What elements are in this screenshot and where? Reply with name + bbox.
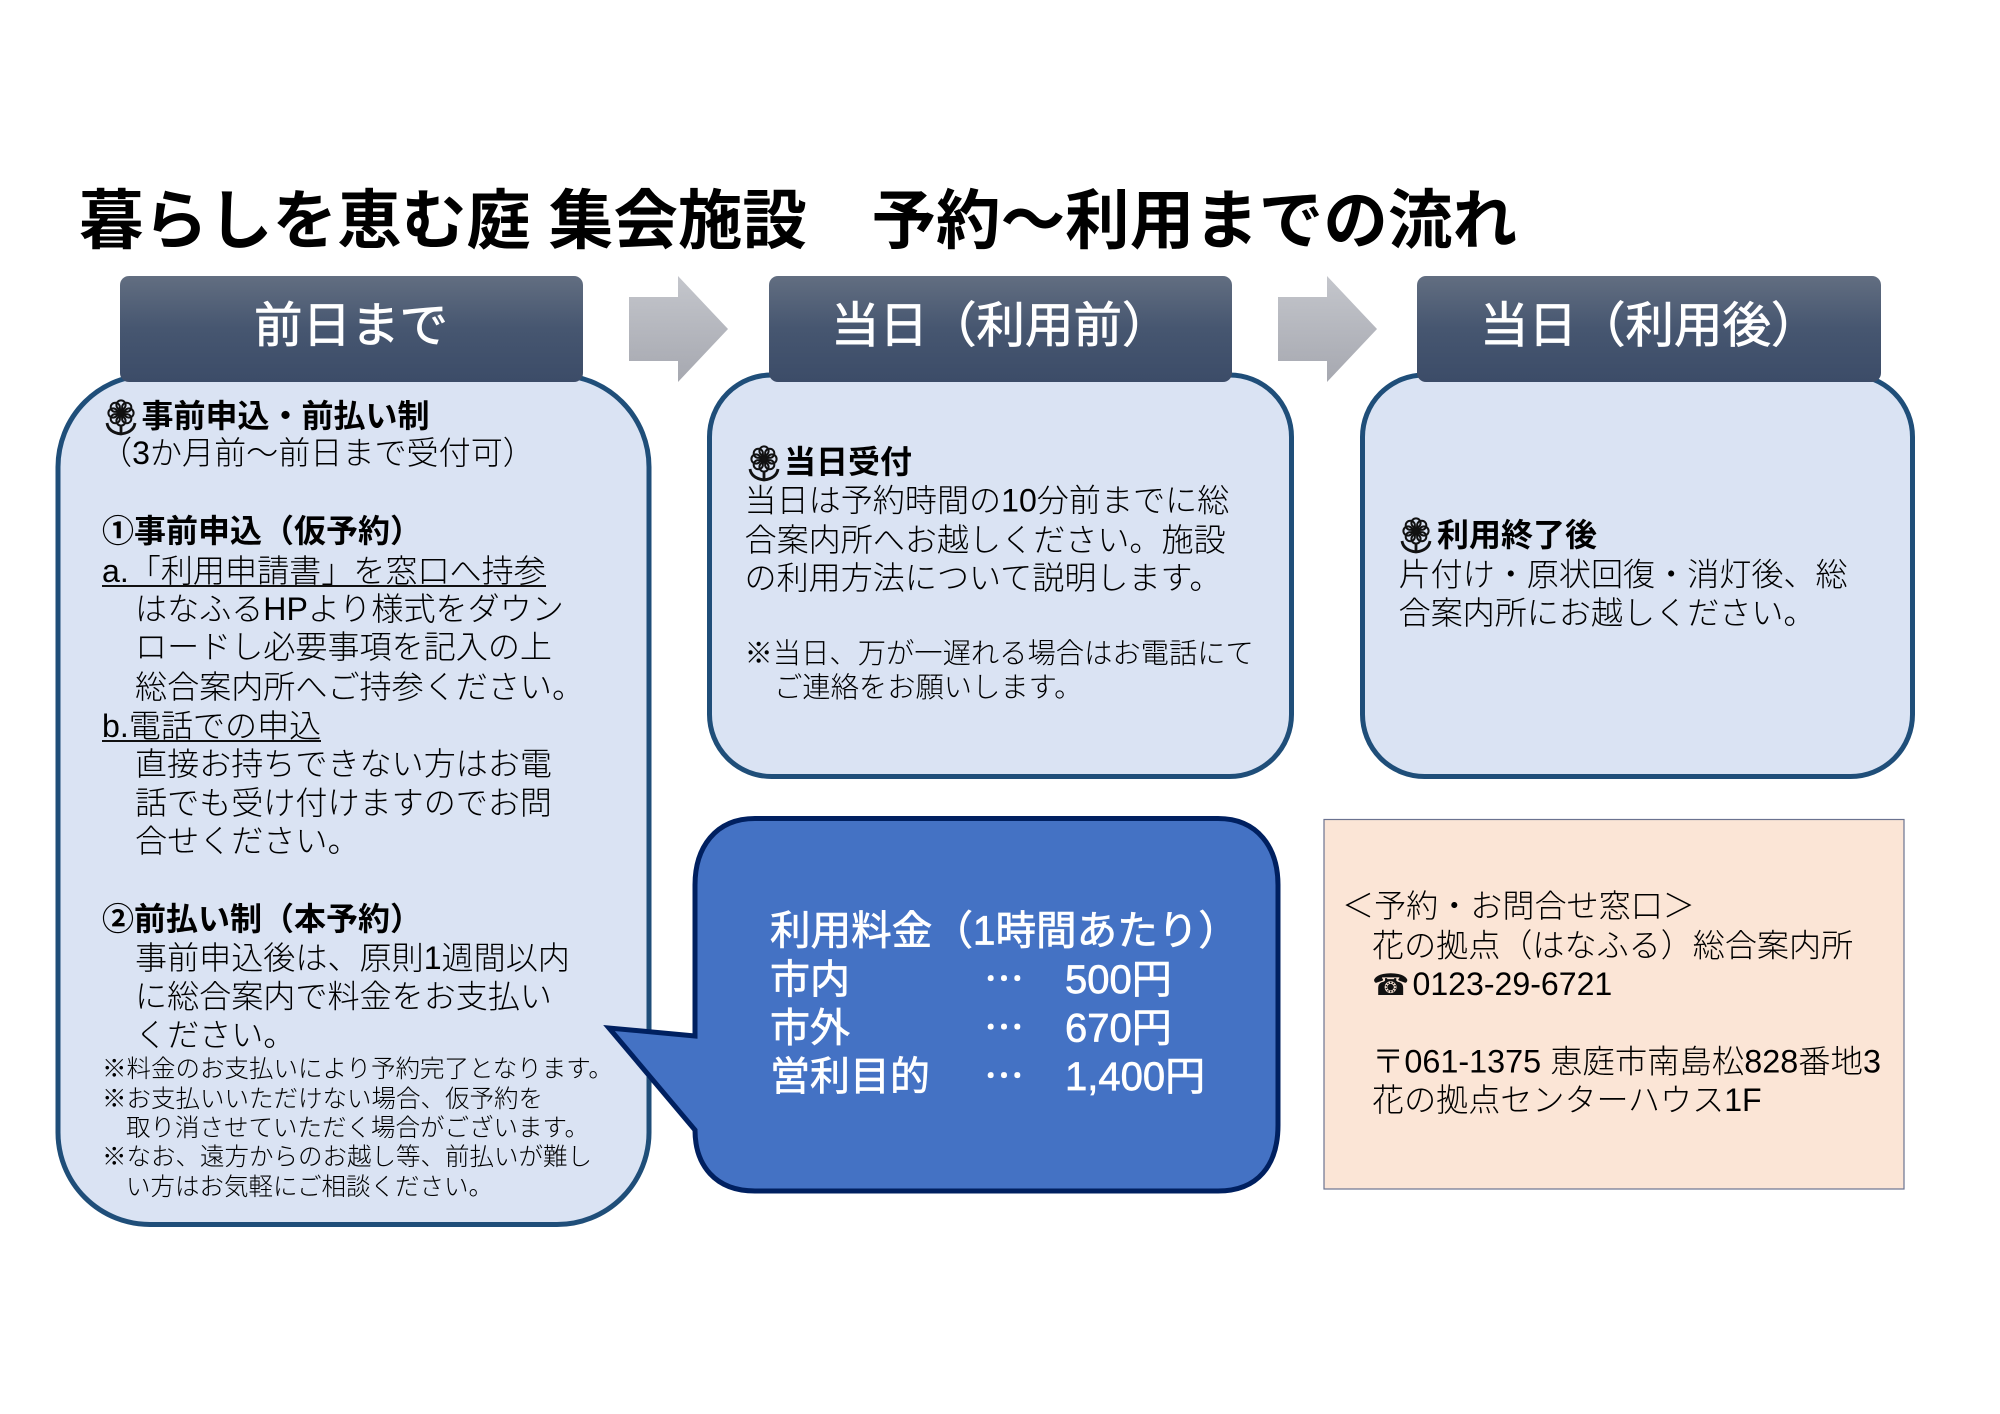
icon: flower	[1402, 518, 1430, 552]
fee text: 市内	[770, 958, 850, 1002]
panel 1 background	[58, 375, 649, 1224]
panel 1 body text: ※お支払いいただけない場合、仮予約を	[102, 1085, 543, 1113]
panel 2 body text: の利用方法について説明します。	[744, 560, 1222, 596]
panel 1 body text: b.電話での申込	[102, 708, 321, 744]
panel 3 background	[1362, 375, 1912, 776]
contact text	[1342, 888, 1881, 1118]
panel 1 body text: ①事前申込（仮予約）	[102, 513, 422, 549]
panel 1 body text	[100, 435, 613, 1201]
heading: advance application: 事前申込・前払い制	[142, 398, 430, 434]
fee text: …	[984, 996, 1024, 1054]
panel 1 body text: 取り消させていただく場合がございます。	[126, 1114, 589, 1142]
panel 1 body text: 合せください。	[135, 823, 360, 859]
panel 1 body text: ※なお、遠方からのお越し等、前払いが難し	[102, 1143, 592, 1171]
panel 3 body text: 合案内所にお越しください。	[1398, 595, 1816, 631]
panel 3 header: 当日（利用後）	[1480, 299, 1820, 353]
contact text: 0123-29-6721	[1412, 966, 1612, 1002]
panel 1 body text: い方はお気軽にご相談ください。	[126, 1173, 493, 1201]
callout shape	[609, 818, 1278, 1191]
panel 1 header	[120, 276, 583, 382]
panel 1 body text: ロードし必要事項を記入の上	[135, 629, 552, 665]
panel 1 body text: はなふるHPより様式をダウン	[135, 591, 564, 627]
fee text: 市外	[770, 1006, 850, 1050]
panel 1 body text: （3か月前～前日まで受付可）	[100, 435, 535, 471]
fee text: …	[984, 947, 1024, 1005]
fee text: 500円	[1065, 958, 1172, 1002]
panel: day of, after use	[1362, 276, 1912, 776]
fee text: 1,400円	[1065, 1055, 1205, 1099]
fee text: 利用料金（1時間あたり）	[770, 908, 1239, 954]
fee text: 営利目的	[770, 1055, 930, 1099]
heading: same-day reception: 当日受付	[784, 444, 912, 480]
panel 1 body text: ください。	[135, 1017, 295, 1053]
panel 1 body text: 直接お持ちできない方はお電	[135, 746, 552, 782]
panel 2 body text: 合案内所へお越しください。施設	[744, 522, 1226, 558]
contact text: 〒061-1375 恵庭市南島松828番地3	[1372, 1044, 1881, 1080]
panel 1 body text: ②前払い制（本予約）	[102, 901, 422, 937]
panel: day of, before use	[710, 276, 1292, 776]
arrow 1	[629, 276, 728, 382]
contact text: 花の拠点（はなふる）総合案内所	[1372, 928, 1853, 964]
fee text	[770, 908, 1239, 1102]
panel 1 body text: に総合案内で料金をお支払い	[135, 978, 552, 1014]
title: 暮らしを恵む庭 集会施設 予約～利用までの流れ	[79, 184, 1517, 257]
panel 1 body text: a.「利用申請書」を窓口へ持参	[102, 553, 546, 589]
panel 2 body text: ※当日、万が一遅れる場合はお電話にて	[744, 637, 1254, 669]
fee text: 670円	[1065, 1006, 1172, 1050]
contact box	[1324, 820, 1904, 1189]
panel 3 body text	[1398, 556, 1848, 631]
fee text: …	[984, 1044, 1024, 1102]
panel 1 body text: 総合案内所へご持参ください。	[135, 669, 584, 705]
panel: before the day	[58, 276, 649, 1224]
panel 1 body text: 話でも受け付けますのでお問	[135, 785, 552, 821]
callout: usage fees	[609, 818, 1278, 1191]
panel 3 body text: 片付け・原状回復・消灯後、総	[1398, 556, 1848, 592]
panel 2 body text: ご連絡をお願いします。	[774, 671, 1082, 703]
contact background	[1324, 820, 1904, 1189]
arrow 2	[1278, 276, 1377, 382]
panel 2 header: 当日（利用前）	[831, 299, 1171, 353]
contact text: ＜予約・お問合せ窓口＞	[1342, 888, 1695, 924]
panel 2 body text: 当日は予約時間の10分前までに総	[744, 482, 1229, 518]
panel 3 header	[1417, 276, 1881, 382]
panel 1 header: 前日まで	[254, 299, 448, 353]
panel 1 body text: 事前申込後は、原則1週間以内	[135, 940, 570, 976]
icon: flower	[750, 446, 778, 480]
panel 1 body text: ※料金のお支払いにより予約完了となります。	[102, 1055, 613, 1083]
contact text: ☎	[1372, 968, 1409, 1003]
icon: flower	[107, 400, 135, 434]
panel 2 background	[710, 375, 1292, 776]
panel 2 body text	[744, 482, 1254, 703]
contact text: 花の拠点センターハウス1F	[1372, 1082, 1762, 1118]
panel 2 header	[769, 276, 1232, 382]
heading: after use: 利用終了後	[1437, 517, 1597, 553]
